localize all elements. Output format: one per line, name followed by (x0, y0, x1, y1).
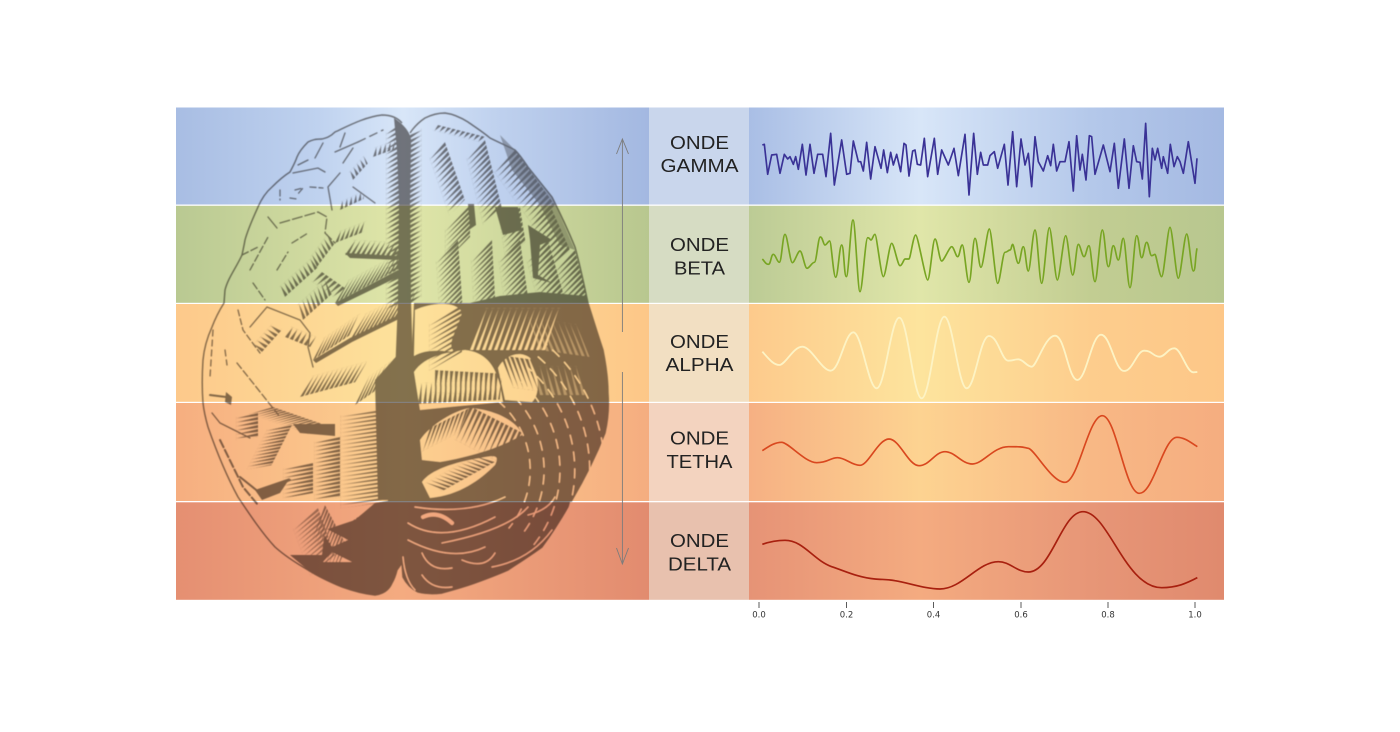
solid mass: right hemisphere lower (402, 292, 608, 594)
thin sulci: left hemisphere (210, 130, 383, 505)
hatching: left hemisphere middle (253, 278, 421, 405)
wave: beta (762, 220, 1197, 292)
brain engraving (202, 113, 608, 595)
solid shadows: right hemisphere upper (460, 135, 575, 283)
wave: alpha (762, 317, 1197, 398)
hatching: left hemisphere upper (279, 140, 411, 303)
light gyri: right hemisphere (414, 304, 538, 498)
x axis: 1.0 (1188, 610, 1202, 620)
label: onde beta (670, 235, 729, 278)
hatching: right hemisphere upper (429, 125, 588, 324)
arrow: up (616, 139, 628, 332)
label: onde alpha: ONDE (670, 332, 729, 352)
arrow: down (616, 372, 628, 564)
coloured band: delta (176, 502, 1224, 600)
coloured band: gamma (176, 108, 1224, 204)
coloured band: tetha (176, 403, 1224, 501)
light strips: right hemisphere upper mass (470, 308, 590, 395)
label: onde delta: ONDE (670, 531, 729, 551)
x axis: 0.8 (1101, 610, 1115, 620)
label: onde gamma (660, 133, 738, 176)
coloured band: beta (176, 206, 1224, 303)
coloured band: alpha (176, 304, 1224, 402)
x axis: 0.6 (1014, 610, 1028, 620)
label: onde beta: BETA (674, 258, 725, 278)
x axis: 0.2 (840, 610, 853, 620)
wave: gamma (762, 123, 1197, 197)
folds: right hemisphere lower (403, 344, 605, 590)
label: onde gamma: GAMMA (660, 156, 738, 176)
label: onde tetha (666, 428, 732, 472)
solid shadows: left hemisphere (225, 253, 405, 500)
brain outline (202, 113, 608, 595)
label: onde gamma: ONDE (670, 133, 729, 153)
x axis: 0.4 (927, 610, 940, 620)
label: onde beta: ONDE (670, 235, 729, 255)
label: onde delta (668, 531, 731, 574)
wave: tetha (762, 416, 1197, 493)
label: onde alpha (666, 332, 734, 375)
hatching over light gyri (418, 305, 547, 491)
label: onde tetha: ONDE (670, 428, 729, 448)
central fissure (386, 118, 421, 563)
x axis: 0.0 (752, 610, 766, 620)
label: onde tetha: TETHA (666, 452, 732, 472)
label: onde alpha: ALPHA (666, 355, 734, 375)
solid mass: left hemisphere lower (290, 497, 412, 595)
x axis (752, 602, 1202, 620)
label: onde delta: DELTA (668, 554, 731, 574)
hatching: left hemisphere lower (236, 407, 400, 508)
wave: delta (762, 512, 1197, 589)
